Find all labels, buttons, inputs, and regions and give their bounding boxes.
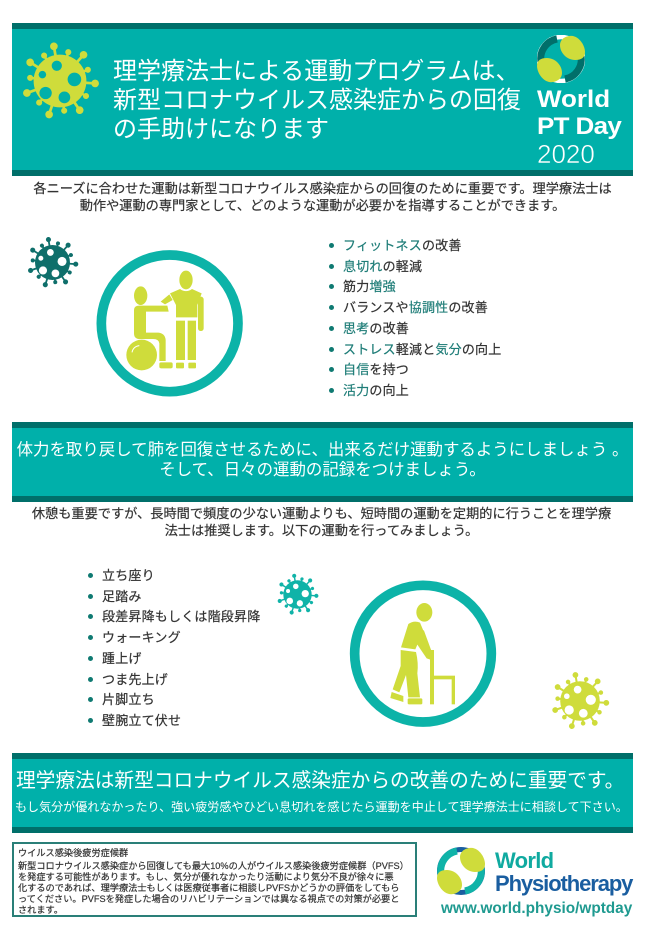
icon: teal virus [278, 574, 318, 615]
title: 理学療法士による運動プログラムは、 [113, 58, 520, 85]
exercises list: 立ち座り [102, 568, 155, 583]
exercises list: 段差昇降もしくは階段昇降 [102, 609, 260, 624]
logo word: World: World [495, 848, 553, 873]
benefits list: 自信を持つ [343, 362, 409, 377]
logo year: 2020 [537, 139, 595, 169]
note body [18, 860, 409, 915]
icon: person with walker in circle [350, 580, 496, 727]
exercises list: つま先上げ [102, 672, 168, 687]
exercises list: 足踏み [102, 589, 142, 604]
note body: されます。 [18, 905, 63, 915]
icon: logo mark [537, 35, 585, 83]
benefits list: 筋力増強 [343, 279, 396, 294]
panel: post-viral fatigue syndrome note [12, 842, 417, 917]
logo wordmark: PT Day: PT Day [537, 112, 621, 140]
note body: 新型コロナウイルス感染症から回復しても最大10%の人がウイルス感染後疲労症候群（PVFS） [18, 861, 409, 871]
header banner [12, 23, 633, 176]
World Physiotherapy logo [437, 847, 634, 917]
benefits list [329, 238, 501, 398]
title [113, 58, 521, 143]
intro paragraph [33, 181, 612, 213]
exercises list: ウォーキング [102, 630, 181, 645]
title: 新型コロナウイルス感染症からの回復 [113, 87, 521, 114]
World PT Day logo [537, 35, 622, 169]
icon: logo mark [437, 847, 485, 895]
rest paragraph: 法士は推奨します。以下の運動を行ってみましょう。 [165, 523, 478, 538]
rest paragraph: 休憩も重要ですが、長時間で頻度の少ない運動よりも、短時間の運動を定期的に行うことを理学療 [32, 506, 611, 521]
banner: importance message [12, 753, 633, 833]
title: の手助けになります [113, 116, 329, 143]
icon: dark virus [28, 237, 78, 288]
exercises list: 片脚立ち [102, 692, 155, 707]
rest paragraph [32, 506, 611, 538]
banner text: そして、日々の運動の記録をつけましょう。 [159, 461, 486, 479]
website address: www.world.physio/wptday [441, 900, 632, 917]
icon: physiotherapist with patient in circle [96, 250, 243, 396]
note body: を発症する可能性があります。もし、気分が優れなかったり活動により気分不良が徐々に悪 [18, 872, 394, 882]
benefits list: ストレス軽減と気分の向上 [343, 342, 501, 357]
exercises list: 壁腕立て伏せ [102, 713, 181, 728]
intro paragraph: 各ニーズに合わせた運動は新型コロナウイルス感染症からの回復のために重要です。理学療法士は [33, 181, 612, 196]
benefits list: バランスや協調性の改善 [343, 300, 488, 315]
benefits list: 活力の向上 [343, 383, 409, 398]
banner subtext: もし気分が優れなかったり、強い疲労感やひどい息切れを感じたら運動を中止して理学療法士に相談して下さい。 [15, 800, 628, 814]
benefits list: フィットネスの改善 [343, 238, 462, 253]
banner text [17, 440, 628, 479]
icon: lime virus small [552, 672, 610, 729]
banner text: 体力を取り戻して肺を回復させるために、出来るだけ運動するようにしましょう 。 [17, 441, 628, 459]
exercises list [88, 568, 260, 728]
intro paragraph: 動作や運動の専門家として、どのような運動が必要かを指導することができます。 [80, 198, 565, 213]
exercises list: 踵上げ [102, 651, 142, 666]
benefits list: 息切れの軽減 [343, 259, 422, 274]
note heading: ウイルス感染後疲労症候群 [18, 848, 128, 858]
note body: 化するのであれば、理学療法士もしくは医療従事者に相談しPVFSかどうかの評価をしてもら [18, 883, 399, 893]
icon: lime virus [23, 42, 99, 118]
benefits list: 思考の改善 [343, 321, 409, 336]
banner heading: 理学療法は新型コロナウイルス感染症からの改善のために重要です。 [16, 770, 624, 792]
logo wordmark: World: World [537, 86, 610, 112]
banner: exercise message [12, 422, 633, 502]
logo word: Physiotherapy: Physiotherapy [495, 871, 632, 896]
note body: ってください。PVFSを発症した場合のリハビリテーションでは異なる視点での対策が必要と [18, 894, 399, 904]
